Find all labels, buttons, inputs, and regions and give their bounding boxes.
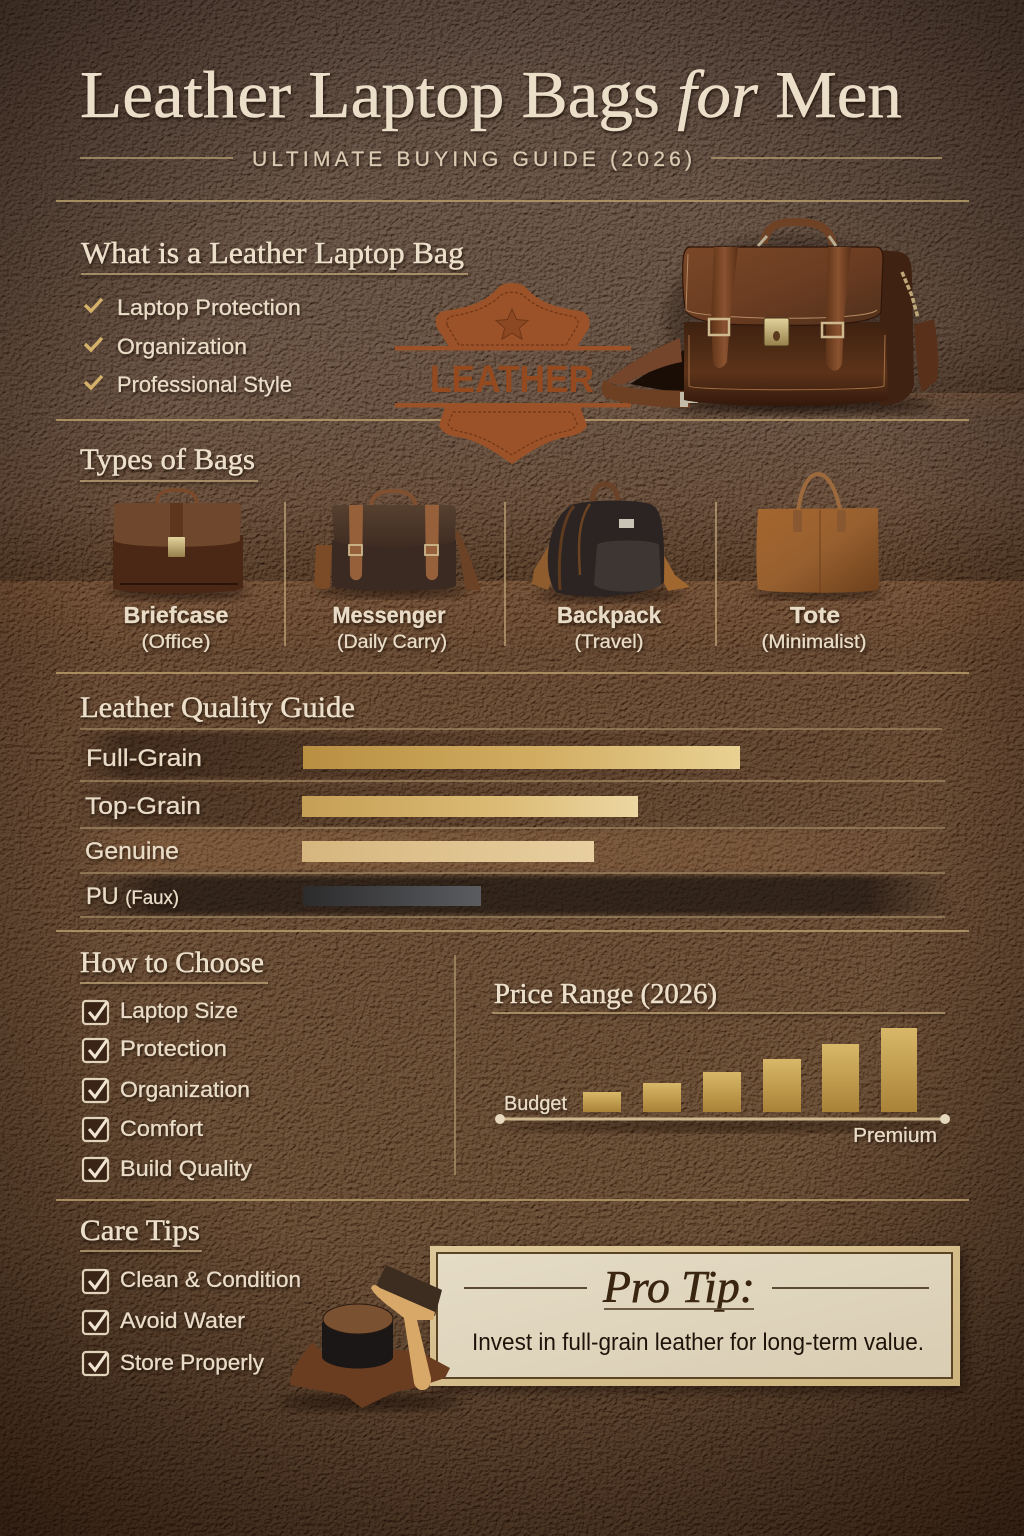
- checklist: how to choose: Build Quality: [120, 1156, 252, 1181]
- leather badge: LEATHER: [430, 359, 594, 401]
- buckles: [709, 319, 729, 335]
- callout heading: Pro Tip:: [602, 1261, 755, 1312]
- checklist: what is: Laptop Protection: [117, 295, 301, 320]
- checklist: what is: [85, 295, 301, 397]
- checklist: how to choose: Laptop Size: [120, 998, 238, 1023]
- right strap: [902, 272, 918, 318]
- row: pu faux: PU (Faux): [86, 883, 179, 910]
- icon: tote bag: [752, 474, 884, 598]
- flap: [683, 247, 883, 325]
- row: genuine: [85, 838, 594, 865]
- checklist: care tips: [83, 1267, 301, 1375]
- sublabel: daily carry: (Daily Carry): [337, 632, 447, 653]
- panel: what is a leather laptop bag: [81, 235, 468, 397]
- panel: how to choose: [80, 946, 268, 1181]
- handle: [764, 222, 833, 245]
- heading: how to choose: How to Choose: [80, 946, 264, 979]
- row: top-grain: Top-Grain: [85, 793, 201, 820]
- panel: leather quality guide: [70, 691, 955, 917]
- heading: quality guide: Leather Quality Guide: [80, 691, 355, 724]
- bag body: [684, 322, 888, 406]
- axis label: budget: Budget: [504, 1093, 567, 1115]
- brush handle: [371, 1285, 435, 1390]
- checklist: how to choose: Comfort: [120, 1116, 203, 1141]
- illustration: care kit: [280, 1265, 460, 1409]
- label: briefcase: Briefcase: [124, 602, 228, 628]
- brush bristles: [374, 1265, 442, 1316]
- checklist: how to choose: Protection: [120, 1036, 227, 1061]
- label: messenger: Messenger: [332, 602, 446, 628]
- chart: quality bars: [70, 729, 955, 917]
- checklist: care tips: Avoid Water: [120, 1308, 245, 1333]
- sublabel: travel: (Travel): [574, 632, 644, 653]
- row: full-grain: Full-Grain: [86, 745, 202, 772]
- axis label: premium: Premium: [853, 1125, 937, 1147]
- strap gap: [630, 350, 684, 394]
- straps on flap: [711, 247, 738, 368]
- icon: backpack: [532, 484, 690, 600]
- icon: briefcase: [105, 490, 249, 598]
- icon: messenger bag: [314, 491, 481, 596]
- checklist: how to choose: [83, 998, 252, 1181]
- strap upper: [606, 338, 682, 385]
- heading: care tips: Care Tips: [80, 1214, 200, 1247]
- cloth: [290, 1342, 450, 1408]
- row: genuine: Genuine: [85, 838, 179, 865]
- heading: price range: Price Range (2026): [494, 979, 717, 1010]
- card: backpack: [532, 484, 690, 653]
- row: full-grain: [86, 745, 740, 772]
- card: messenger: [314, 491, 481, 653]
- chart: price bars: [495, 1028, 950, 1147]
- callout text: Invest in full-grain leather for long-term value.: [472, 1329, 924, 1356]
- label: tote: Tote: [790, 602, 840, 628]
- jar: [322, 1322, 393, 1368]
- heading: types of bags: Types of Bags: [80, 443, 255, 476]
- checklist: what is: Organization: [117, 334, 247, 359]
- sublabel: office: (Office): [142, 632, 210, 653]
- card: tote: [752, 474, 884, 653]
- row: pu faux: [86, 883, 481, 910]
- panel: care tips: [80, 1214, 301, 1375]
- strap lower: [602, 380, 690, 408]
- leather badge: [395, 283, 631, 464]
- heading: what is: What is a Leather Laptop Bag: [81, 235, 464, 270]
- checklist: care tips: Clean & Condition: [120, 1267, 301, 1292]
- label: backpack: Backpack: [557, 602, 661, 628]
- subtitle: ULTIMATE BUYING GUIDE (2026): [252, 148, 692, 171]
- title: Leather Laptop Bags for Men: [80, 58, 902, 132]
- clasp: [764, 318, 789, 346]
- illustration: hero satchel: [602, 222, 938, 412]
- right gusset: [880, 250, 914, 406]
- panel: price range: [492, 979, 950, 1147]
- row: top-grain: [85, 793, 638, 820]
- sublabel: minimalist: (Minimalist): [762, 632, 866, 653]
- callout: pro tip: [430, 1246, 964, 1390]
- checklist: what is: Professional Style: [117, 372, 292, 397]
- checklist: how to choose: Organization: [120, 1077, 250, 1102]
- card: briefcase: [105, 490, 249, 653]
- checklist: care tips: Store Properly: [120, 1350, 264, 1375]
